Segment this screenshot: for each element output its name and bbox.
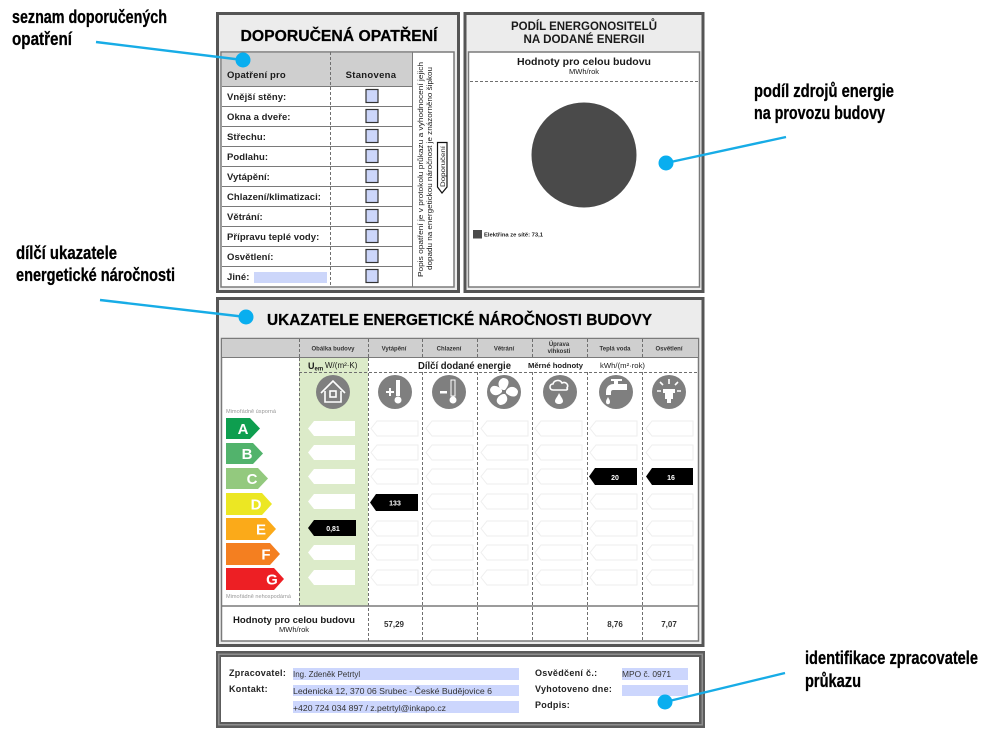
- callout: energy source share: na provozu budovy: [754, 103, 885, 123]
- callout: energy source share: [658, 81, 894, 170]
- table header row: Opatření pro: [227, 70, 286, 81]
- icon: humidity: [543, 375, 577, 409]
- certificate number: MPO č. 0971: [622, 670, 672, 679]
- input fields: [293, 668, 688, 713]
- value marker: lighting 16: [646, 468, 693, 485]
- value marker: heating 133: 133: [389, 500, 401, 508]
- callout: recommended measures: seznam doporučených: [12, 7, 167, 27]
- units row: W/(m²·K): [325, 361, 358, 370]
- icon: water tap: [599, 375, 633, 409]
- table column headers: Vytápění: [382, 346, 407, 352]
- value marker: envelope 0,81: 0,81: [326, 526, 340, 533]
- panel: recommended measures: [218, 14, 458, 292]
- empty value boxes: [371, 421, 693, 585]
- table rows with checkboxes: Přípravu teplé vody:: [227, 232, 319, 243]
- rotated note: Popis opatření je v protokolu průkazu a vyhodnocení jejich: [416, 62, 425, 277]
- table column headers: Obálka budovy: [311, 346, 355, 352]
- icon: heating thermometer: [378, 375, 412, 409]
- certificate labels: Vyhotoveno dne:: [535, 684, 612, 694]
- scale label: bottom: Mimořádně nehospodárná: [226, 594, 291, 600]
- subheading: whole building values: Hodnoty pro celou budovu: [517, 56, 651, 68]
- value marker: lighting 16: 16: [667, 475, 675, 482]
- scale label: top: Mimořádně úsporná: [226, 409, 276, 415]
- table rows with checkboxes: Střechu:: [227, 132, 266, 143]
- totals row: MWh/rok: [279, 625, 309, 634]
- callout: partial indicators: energetické náročnosti: [16, 265, 175, 285]
- energy class B: B: [242, 446, 253, 463]
- energy class D: [226, 493, 272, 515]
- panel: energy performance indicators: [218, 298, 703, 646]
- table column headers: Chlazení: [437, 346, 462, 352]
- assessor details: [293, 670, 493, 713]
- callout: recommended measures: opatření: [12, 29, 73, 49]
- icon: cooling thermometer: [432, 375, 466, 409]
- icon: house: [316, 375, 350, 409]
- table header row: Stanovena: [346, 70, 397, 81]
- arrow tag: recommended: Doporučení: [440, 146, 447, 187]
- totals row: 7,07: [661, 620, 677, 629]
- callout: partial indicators: [16, 243, 254, 324]
- table column headers: [222, 339, 698, 358]
- units row: kWh/(m²·rok): [600, 361, 646, 370]
- energy class C: C: [247, 471, 258, 488]
- energy class E: [226, 518, 276, 540]
- panel: assessor identification: [216, 651, 705, 728]
- table rows with checkboxes: Osvětlení:: [227, 252, 273, 263]
- assessor labels: Zpracovatel:: [229, 668, 286, 678]
- energy class F: [226, 543, 280, 565]
- table column headers: Teplá voda: [600, 346, 631, 352]
- table column headers: Osvětlení: [655, 346, 683, 352]
- table column headers: Úprava: [549, 341, 570, 348]
- callout: recommended measures: [12, 7, 250, 68]
- energy class C: [226, 468, 268, 489]
- totals row: Hodnoty pro celou budovu: [233, 615, 355, 626]
- value marker: hot water 20: [589, 468, 637, 485]
- assessor details: Ledenická 12, 370 06 Srubec - České Budějovice 6: [293, 687, 493, 696]
- assessor labels: [229, 668, 286, 694]
- table rows with checkboxes: Vytápění:: [227, 172, 270, 183]
- energy class A: A: [238, 421, 249, 438]
- icon: light bulb: [652, 375, 686, 409]
- table rows with checkboxes: Vnější stěny:: [227, 92, 286, 103]
- heading: energy carriers share: PODÍL ENERGONOSITELŮ: [511, 19, 657, 33]
- totals row: 57,29: [384, 620, 405, 629]
- pie chart: [532, 102, 636, 208]
- rotated note: [416, 62, 434, 277]
- energy class A: [226, 418, 260, 439]
- table rows with checkboxes: Jiné:: [227, 272, 249, 283]
- energy class F: F: [261, 546, 271, 564]
- assessor labels: Kontakt:: [229, 684, 268, 694]
- assessor details: Ing. Zdeněk Petrtyl: [293, 670, 360, 679]
- subheading: whole building values: [517, 56, 651, 76]
- certificate labels: Osvědčení č.:: [535, 668, 597, 678]
- certificate labels: Podpis:: [535, 700, 570, 710]
- totals row: 8,76: [607, 620, 623, 629]
- energy class G: [226, 568, 284, 590]
- table rows with checkboxes: Chlazení/klimatizaci:: [227, 192, 321, 203]
- pie legend: Elektřina ze sítě: 73,1: [484, 232, 543, 238]
- table header row: [222, 53, 412, 86]
- callout: energy source share: podíl zdrojů energie: [754, 81, 894, 101]
- heading: energy carriers share: [511, 19, 657, 46]
- callout: partial indicators: dílčí ukazatele: [16, 243, 117, 263]
- envelope column background: [299, 358, 368, 606]
- heading: energy performance indicators: UKAZATELE ENERGETICKÉ NÁROČNOSTI BUDOVY: [267, 310, 652, 329]
- table rows with checkboxes: Podlahu:: [227, 152, 268, 163]
- value marker: heating 133: [370, 494, 418, 511]
- units row: Dílčí dodané energie: [418, 361, 511, 372]
- heading: energy carriers share: NA DODANÉ ENERGII: [524, 33, 644, 46]
- pie legend: [473, 230, 543, 238]
- energy class B: [226, 443, 263, 464]
- arrow tag: recommended: [438, 142, 447, 193]
- envelope value boxes: [308, 421, 355, 585]
- units row: U: [308, 361, 314, 371]
- value marker: hot water 20: 20: [611, 475, 619, 482]
- table column headers: Větrání: [494, 346, 515, 352]
- units row: [308, 361, 646, 372]
- rotated note: dopadu na energetickou náročnost je znázorněno šipkou: [425, 67, 434, 270]
- table rows with checkboxes: [222, 52, 412, 287]
- units row: em: [314, 366, 323, 372]
- table column headers: vlhkosti: [548, 349, 571, 355]
- value marker: envelope 0,81: [308, 520, 356, 536]
- panel: energy carriers share: [465, 14, 703, 292]
- callout: assessor identification: průkazu: [805, 671, 861, 691]
- totals row: [233, 615, 677, 634]
- energy class G: G: [266, 572, 278, 588]
- callout: assessor identification: [658, 648, 978, 710]
- energy class E: E: [256, 522, 266, 538]
- certificate labels: [535, 668, 612, 710]
- subheading: whole building values: MWh/rok: [569, 67, 599, 76]
- assessor details: +420 724 034 897 / z.petrtyl@inkapo.cz: [293, 704, 446, 713]
- table rows with checkboxes: Větrání:: [227, 212, 263, 223]
- energy class D: D: [251, 496, 262, 514]
- icon: fan: [487, 375, 521, 409]
- units row: Měrné hodnoty: [528, 361, 584, 370]
- heading: recommended measures: DOPORUČENÁ OPATŘENÍ: [240, 26, 438, 45]
- table rows with checkboxes: Okna a dveře:: [227, 112, 290, 123]
